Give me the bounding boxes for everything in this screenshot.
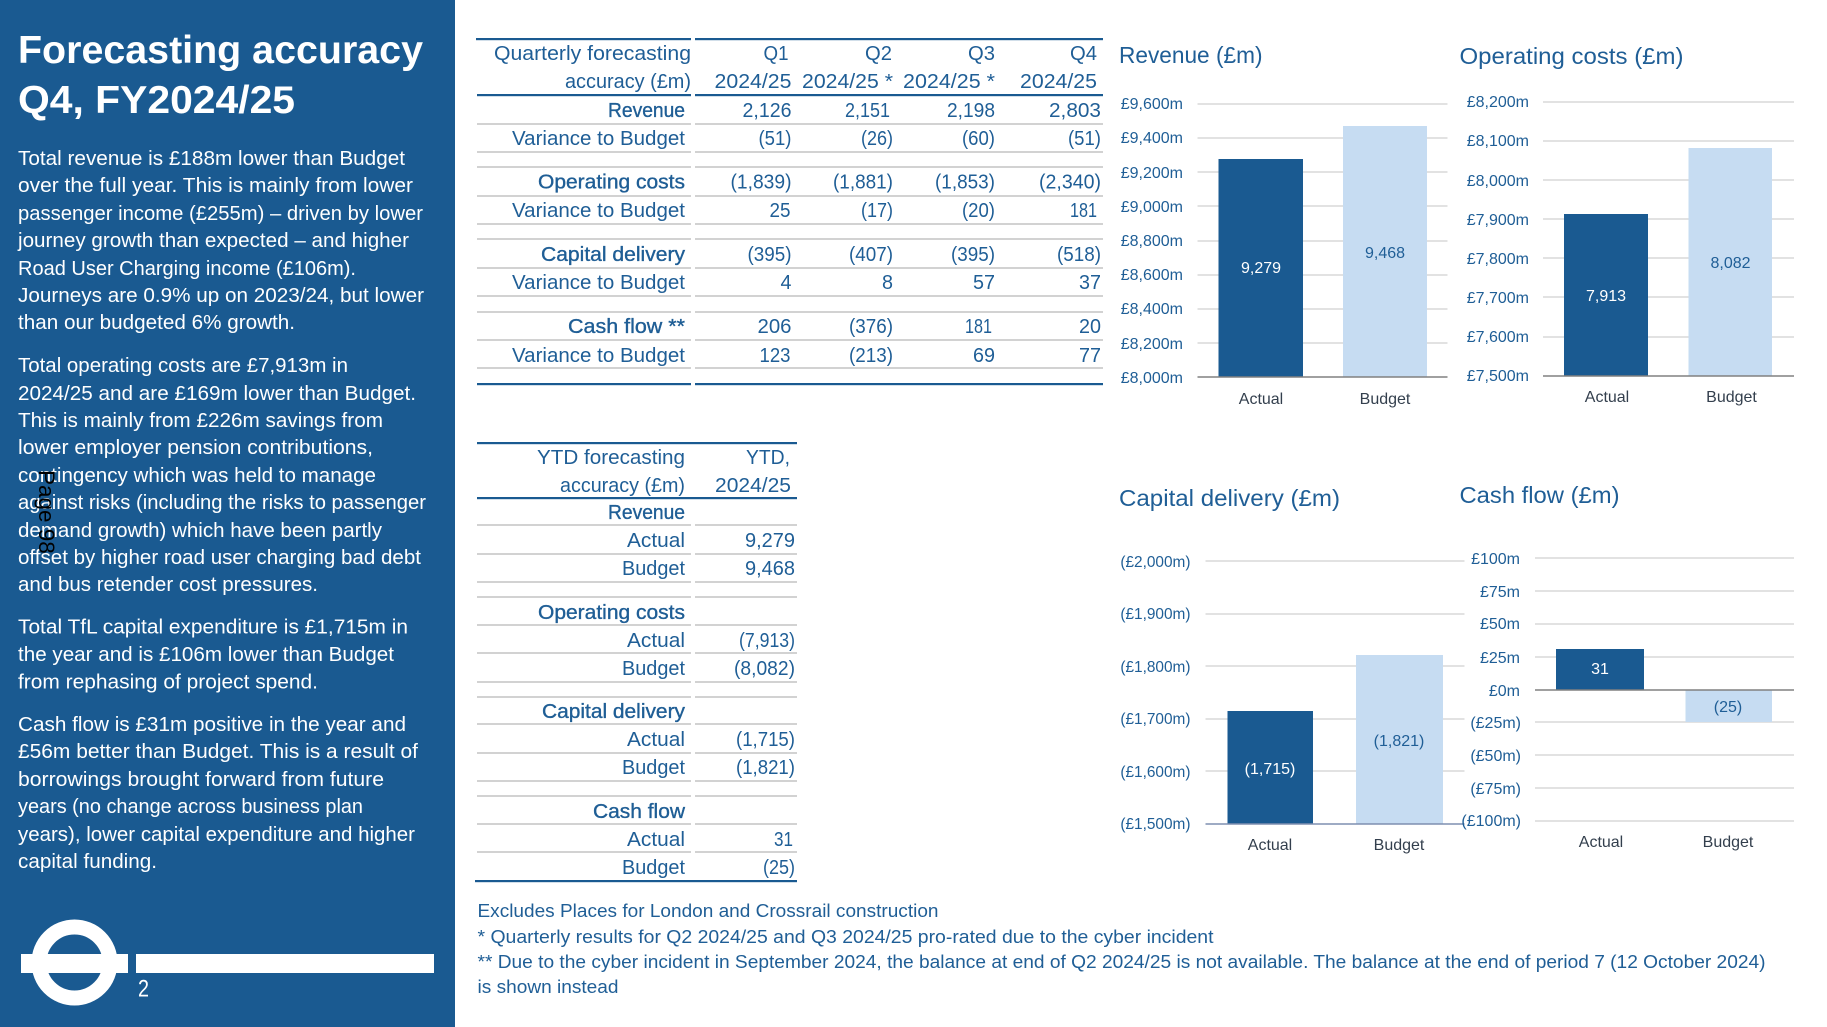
row group: revenue: Revenue (608, 99, 685, 122)
text block: capital summary: from rephasing of project spend. (18, 670, 318, 694)
text block: operating costs summary: Total operating costs are £7,913m in (18, 354, 348, 377)
row group: revenue: Revenue (608, 501, 685, 524)
text block: cash flow summary (18, 713, 418, 873)
bar: actual: 31 (1591, 661, 1609, 678)
y axis labels: £7,700m (1467, 290, 1529, 307)
row group: revenue: Actual (627, 529, 685, 552)
chart title: Cash flow (£m) (1460, 482, 1620, 508)
y axis labels: £9,600m (1121, 96, 1183, 113)
row group: capital delivery: Actual (627, 728, 685, 751)
row group: operating costs: (20) (962, 199, 995, 222)
row group: capital delivery: 4 (780, 271, 792, 294)
y axis labels: £8,000m (1467, 173, 1529, 190)
table header row: Q2 (865, 42, 892, 65)
text block: cash flow summary: years (no change across business plan (18, 795, 363, 818)
row group: capital delivery: 8 (882, 271, 893, 294)
row group: operating costs: Operating costs (538, 601, 685, 624)
y axis labels: £0m (1489, 683, 1520, 700)
chart title: Operating costs (£m) (1460, 43, 1684, 69)
row group: cash flow (593, 800, 795, 879)
row group: cash flow (512, 315, 1101, 367)
x axis labels (1579, 834, 1754, 851)
chart: capital delivery (1119, 485, 1464, 854)
bar: budget (1356, 655, 1443, 824)
text block: operating costs summary: lower employer pension contributions, (18, 436, 373, 459)
row group: revenue: 2,198 (947, 99, 995, 122)
y axis labels: £8,200m (1467, 94, 1529, 111)
row group: capital delivery: 37 (1079, 271, 1101, 294)
y axis labels: (£1,500m) (1120, 816, 1190, 833)
bar: budget: (1,821) (1374, 733, 1424, 750)
y axis labels: (£1,800m) (1120, 659, 1190, 676)
row group: cash flow: (376) (849, 315, 893, 338)
page stamp: Page 98 (34, 470, 59, 554)
y axis labels: £8,100m (1467, 133, 1529, 150)
title: Forecasting accuracy (18, 29, 424, 72)
text block: operating costs summary: This is mainly from £226m savings from (18, 409, 383, 432)
row group: capital delivery (512, 243, 1101, 294)
y axis labels: (£50m) (1470, 748, 1521, 765)
row group: cash flow: (25) (763, 856, 795, 879)
table header row: 2024/25 (1020, 70, 1097, 93)
chart: operating costs (1460, 43, 1794, 406)
table header row: 2024/25 * (802, 70, 893, 93)
row group: revenue (608, 501, 795, 580)
row group: revenue: Variance to Budget (512, 127, 685, 150)
row group: cash flow: Cash flow (593, 800, 685, 823)
y axis labels: £25m (1480, 650, 1520, 667)
row group: cash flow: 20 (1079, 315, 1101, 338)
footnotes: Excludes Places for London and Crossrail construction (478, 900, 938, 921)
text block: revenue summary: passenger income (£255m) – driven by lower (18, 202, 423, 225)
x axis labels: Actual (1585, 389, 1629, 406)
row group: revenue: 9,468 (745, 557, 795, 580)
row group: capital delivery: (518) (1057, 243, 1101, 266)
text block: cash flow summary: capital funding. (18, 850, 157, 873)
row group: operating costs: 181 (1070, 199, 1097, 222)
text block: operating costs summary: offset by higher road user charging bad debt (18, 546, 421, 569)
row group: cash flow: 77 (1079, 344, 1101, 367)
text block: revenue summary: than our budgeted 6% growth. (18, 311, 295, 334)
y axis labels: £7,500m (1467, 368, 1529, 385)
text block: capital summary (18, 616, 408, 694)
text block: operating costs summary: against risks (including the risks to passenger (18, 491, 426, 514)
x axis labels: Budget (1360, 391, 1411, 408)
bar: actual (1228, 711, 1313, 824)
row group: revenue: 2,126 (742, 99, 792, 122)
row group: operating costs (538, 601, 795, 680)
text block: operating costs summary: and bus retender cost pressures. (18, 573, 318, 596)
row group: revenue: 2,803 (1049, 99, 1101, 122)
row group: revenue: Budget (622, 557, 685, 580)
text block: revenue summary (17, 147, 424, 334)
text block: cash flow summary: borrowings brought forward from future (18, 768, 384, 791)
row group: operating costs: (7,913) (739, 629, 795, 652)
text block: operating costs summary: demand growth) which have been partly (18, 519, 383, 542)
title (18, 29, 424, 122)
x axis labels (1239, 391, 1411, 408)
x axis labels: Actual (1579, 834, 1623, 851)
footnotes (478, 900, 1766, 997)
row group: revenue: 2,151 (845, 99, 890, 122)
footnotes: is shown instead (478, 976, 618, 997)
row group: operating costs: (8,082) (734, 657, 795, 680)
row group: operating costs: Actual (627, 629, 685, 652)
bar: budget: (25) (1714, 699, 1742, 716)
row group: operating costs: Operating costs (538, 170, 685, 194)
row group: capital delivery: 57 (973, 271, 995, 294)
table header row: Quarterly forecasting (494, 42, 691, 65)
y axis labels: £8,800m (1121, 233, 1183, 250)
y axis labels: £8,200m (1121, 336, 1183, 353)
row group: cash flow: 31 (774, 828, 793, 851)
table header row: Q3 (968, 42, 995, 65)
bar: budget (1343, 126, 1427, 377)
bar: budget: 8,082 (1710, 255, 1751, 272)
row group: operating costs: (17) (861, 199, 893, 222)
table: YTD forecasting accuracy (475, 442, 797, 882)
row group: capital delivery: (1,821) (736, 756, 795, 779)
y axis labels: £50m (1480, 616, 1520, 633)
x axis labels: Actual (1248, 837, 1292, 854)
y axis labels: (£25m) (1470, 715, 1521, 732)
row group: capital delivery: (407) (849, 243, 893, 266)
row group: operating costs: (1,881) (833, 170, 893, 194)
text block: capital summary: Total TfL capital expenditure is £1,715m in (18, 616, 408, 638)
row group: capital delivery: (395) (951, 243, 995, 266)
panel: left summary (0, 0, 455, 1027)
icon: roundel logo (21, 927, 434, 998)
table header row (494, 42, 1097, 93)
y axis labels: (£1,900m) (1120, 606, 1190, 623)
table header row: Q1 (764, 42, 788, 65)
row group: capital delivery: Budget (622, 756, 685, 779)
row group: operating costs (512, 170, 1101, 222)
row group: cash flow: 69 (973, 344, 995, 367)
chart: revenue (1119, 42, 1448, 408)
y axis labels: (£100m) (1461, 813, 1521, 830)
page number: 2 (138, 976, 149, 1002)
y axis labels: £7,800m (1467, 251, 1529, 268)
row group: revenue: (60) (962, 127, 995, 150)
row group: revenue: 9,279 (745, 529, 795, 552)
bar: actual: (1,715) (1245, 761, 1295, 778)
row group: revenue: (51) (758, 127, 792, 150)
row group: cash flow: Budget (622, 856, 685, 879)
bar: budget (1688, 148, 1772, 376)
row group: cash flow: 123 (760, 344, 790, 367)
table header row: Q4 (1070, 42, 1097, 65)
row group: cash flow: Variance to Budget (512, 344, 685, 367)
y axis labels (1467, 94, 1529, 385)
row group: revenue (512, 99, 1101, 150)
y axis labels: (£2,000m) (1120, 554, 1190, 571)
y axis labels: £8,000m (1121, 370, 1183, 387)
chart title: Revenue (£m) (1119, 42, 1262, 68)
text block: revenue summary: Total revenue is £188m lower than Budget (18, 147, 405, 170)
row group: capital delivery: (1,715) (736, 728, 795, 751)
table header row: accuracy (£m) (560, 474, 685, 497)
row group: cash flow: 181 (965, 315, 992, 338)
chart title: Capital delivery (£m) (1119, 485, 1340, 511)
bar: budget: 9,468 (1365, 245, 1405, 262)
table header row: accuracy (£m) (565, 70, 691, 93)
y axis labels: (£75m) (1470, 781, 1521, 798)
y axis labels: £7,900m (1467, 212, 1529, 229)
table header row: YTD, (746, 446, 790, 469)
table header row (537, 446, 791, 497)
y axis labels (1461, 551, 1521, 830)
table header row: 2024/25 * (903, 70, 995, 93)
row group: capital delivery (542, 700, 795, 779)
bar: actual: 9,279 (1241, 260, 1281, 277)
text block: cash flow summary: Cash flow is £31m positive in the year and (18, 713, 406, 736)
text block: cash flow summary: £56m better than Budget. This is a result of (18, 740, 418, 763)
table header row: 2024/25 (714, 70, 792, 93)
table: quarterly forecasting accuracy (476, 38, 1103, 385)
row group: capital delivery: (395) (748, 243, 792, 266)
text block: revenue summary: over the full year. This is mainly from lower (18, 174, 413, 197)
bar: budget (1686, 690, 1772, 722)
row group: operating costs: Variance to Budget (512, 199, 685, 222)
row group: operating costs: 25 (770, 199, 790, 222)
row group: capital delivery: Variance to Budget (512, 271, 685, 294)
x axis labels: Budget (1374, 837, 1425, 854)
y axis labels: (£1,600m) (1120, 764, 1190, 781)
text block: capital summary: the year and is £106m lower than Budget (18, 643, 394, 666)
row group: cash flow: Cash flow ** (568, 315, 685, 338)
text block: revenue summary: Journeys are 0.9% up on 2023/24, but lower (18, 284, 424, 307)
footnotes: ** Due to the cyber incident in September 2024, the balance at end of Q2 2024/25 is not available. The balance at the end of period 7 (12 October 2024) (478, 951, 1766, 972)
y axis labels: £9,000m (1121, 199, 1183, 216)
bar: actual (1556, 649, 1644, 690)
row group: operating costs: (2,340) (1039, 170, 1101, 194)
bar: actual (1218, 159, 1303, 377)
row group: cash flow: (213) (849, 344, 893, 367)
y axis labels: (£1,700m) (1120, 711, 1190, 728)
row group: capital delivery: Capital delivery (541, 243, 686, 266)
chart: cash flow (1460, 482, 1794, 851)
y axis labels: £8,600m (1121, 267, 1183, 284)
row group: cash flow: 206 (758, 315, 792, 338)
text block: operating costs summary: 2024/25 and are £169m lower than Budget. (18, 382, 416, 405)
y axis labels: £75m (1480, 584, 1520, 601)
x axis labels: Budget (1703, 834, 1754, 851)
y axis labels: £9,200m (1121, 165, 1183, 182)
row group: revenue: (26) (861, 127, 893, 150)
footnotes: * Quarterly results for Q2 2024/25 and Q3 2024/25 pro-rated due to the cyber incident (478, 926, 1214, 947)
bar: actual (1564, 214, 1648, 376)
y axis labels (1120, 554, 1190, 833)
table header row: YTD forecasting (537, 446, 685, 469)
x axis labels (1248, 837, 1425, 854)
row group: capital delivery: Capital delivery (542, 700, 686, 723)
title: Q4, FY2024/25 (18, 79, 295, 122)
x axis labels: Budget (1706, 389, 1757, 406)
y axis labels: £100m (1471, 551, 1520, 568)
text block: revenue summary: Road User Charging income (£106m). (18, 257, 356, 280)
y axis labels (1121, 96, 1183, 387)
row group: operating costs: (1,839) (730, 170, 792, 194)
row group: operating costs: Budget (622, 657, 685, 680)
text block: cash flow summary: years), lower capital expenditure and higher (18, 823, 415, 846)
row group: cash flow: Actual (627, 828, 685, 851)
y axis labels: £9,400m (1121, 130, 1183, 147)
x axis labels: Actual (1239, 391, 1283, 408)
x axis labels (1585, 389, 1757, 406)
y axis labels: £7,600m (1467, 329, 1529, 346)
text block: operating costs summary (18, 354, 426, 596)
y axis labels: £8,400m (1121, 301, 1183, 318)
table header row: 2024/25 (715, 474, 791, 497)
text block: revenue summary: journey growth than expected – and higher (17, 229, 409, 252)
row group: revenue: (51) (1068, 127, 1101, 150)
text block: operating costs summary: contingency which was held to manage (18, 464, 376, 487)
row group: operating costs: (1,853) (935, 170, 995, 194)
bar: actual: 7,913 (1586, 288, 1626, 305)
